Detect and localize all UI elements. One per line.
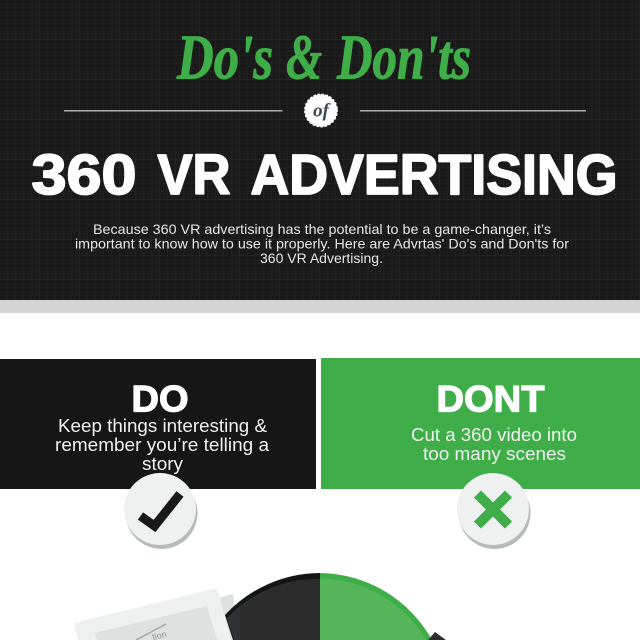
icon: check badge — [124, 473, 198, 549]
heading: Do's & Don'ts: & — [286, 22, 322, 92]
text block: dont advice — [411, 424, 577, 464]
text block: intro: 360 VR Advertising. — [260, 250, 383, 266]
divider: right rule — [360, 110, 586, 112]
panel: header — [0, 0, 640, 300]
illustration: dark handle — [428, 632, 446, 640]
title: 360 VR Advertising: VR — [158, 143, 230, 207]
text block: do advice — [55, 415, 270, 474]
heading: Do's & Don'ts — [176, 22, 471, 92]
title: 360 VR Advertising — [32, 143, 618, 207]
text block: intro: Because 360 VR advertising has the potential to be a game-changer, it’s — [93, 221, 551, 237]
text block: do advice: story — [142, 453, 184, 474]
text block: intro — [75, 221, 569, 266]
icon: cross badge — [457, 473, 530, 549]
heading: Do's & Don'ts: Don'ts — [336, 22, 471, 92]
text block: do advice: Keep things interesting & — [58, 415, 268, 436]
text block: dont advice: Cut a 360 video into — [411, 424, 577, 445]
text block: do advice: remember you’re telling a — [55, 434, 270, 455]
title: 360 VR Advertising: ADVERTISING — [250, 143, 618, 207]
badge: of: of — [313, 100, 331, 122]
text block: dont advice: too many scenes — [423, 443, 566, 464]
text block: intro: important to know how to use it properly. Here are Advrtas' Do's and Don'ts for — [75, 236, 569, 252]
title: 360 VR Advertising: 360 — [32, 143, 136, 207]
panel: dont — [321, 358, 640, 489]
panel: do — [0, 359, 316, 489]
badge: of — [306, 96, 336, 126]
illustration: dark half dial — [225, 573, 320, 640]
heading: DONT: DONT — [436, 378, 545, 420]
illustration: papers — [74, 588, 240, 640]
illustration: green half dial — [320, 573, 432, 640]
heading: DO: DO — [132, 378, 188, 420]
heading: Do's & Don'ts: Do's — [176, 22, 273, 92]
grey band — [0, 300, 640, 313]
divider: left rule — [64, 110, 282, 112]
